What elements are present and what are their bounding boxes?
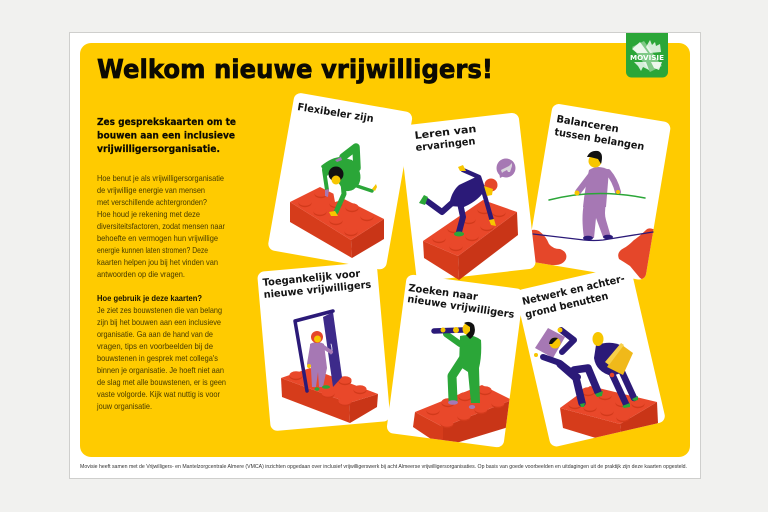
card: Flexibeler zijn [267,92,413,270]
usage text: vaste volgorde. Kijk wat nuttig is voor [97,390,220,399]
usage heading: Hoe gebruik je deze kaarten? [97,293,202,303]
illustration: figure with telescope on brick [413,322,512,447]
card title: Netwerk en achter- [521,274,626,308]
logo: Movisie: MOVISIE [630,54,664,62]
card title [414,124,477,154]
subheading: vrijwilligersorganisatie. [97,144,220,155]
usage text: de slag met alle bouwstenen, er is geen [97,378,226,387]
card: Toegankelijk voor nieuwe vrijwilligers [257,262,390,431]
yellow panel [80,43,690,457]
icon: speech bubble with zebra [496,158,516,178]
usage text: Je ziet zes bouwstenen die van belang [97,306,222,315]
card: Balanceren tussen belangen [526,103,671,284]
card title: Zoeken naar [408,283,478,303]
illustration: tightrope walker [532,150,654,279]
intro text: energie kunnen laten stromen? Deze [97,246,208,255]
card title [262,269,372,301]
card: Netwerk en achtergrond benutten [515,264,666,448]
usage text: jouw organisatie. [96,402,152,411]
illustration: stumbling figure on brick [419,158,518,280]
intro text [97,174,225,279]
intro text: behoefte en vermogen hun vrijwillige [97,234,218,243]
usage text [96,306,226,411]
card title: Balanceren [556,114,619,135]
logo: Movisie [626,33,668,78]
white sheet [70,32,700,478]
title: Welkom nieuwe vrijwilligers! [97,55,493,85]
usage text: binnen je organisatie. Je hoeft niet aan [97,366,224,375]
card title: tussen belangen [554,127,645,153]
subheading: Zes gesprekskaarten om te [97,117,236,128]
card title: Leren van [414,124,477,142]
intro text: Hoe benut je als vrijwilligersorganisatie [97,174,224,183]
card title: ervaringen [415,136,476,154]
card title: grond benutten [524,291,609,321]
card: Zoeken naar nieuwe vrijwilligers [386,274,524,448]
card title: Toegankelijk voor [262,269,361,289]
intro text: de vrijwillige energie van mensen [97,186,205,195]
intro text: diversiteitsfactoren, zodat mensen naar [97,222,225,231]
usage text: organisatie. Ga aan de hand van de [97,330,213,339]
card title: nieuwe vrijwilligers [407,294,515,321]
usage text: zijn bij het bouwen aan een inclusieve [97,318,221,327]
footnote: Movisie heeft samen met de Vrijwilligers- en Mantelzorgcentrale Almere (VMCA) inzichten opgedaan over inclusief vrijwilligerswerk bij acht Almeerse vrijwilligersorganisaties. Op basis van goede voorbeelden en uitdagingen uit de praktijk zijn deze kaarten opgesteld. [80,464,687,470]
intro text: kaarten helpen jou bij het vinden van [97,258,218,267]
card title: Flexibeler zijn [297,102,374,125]
illustration: two figures carrying bricks [534,328,658,446]
subheading: bouwen aan een inclusieve [97,130,235,142]
usage text: vragen, tips en voorbeelden bij de [97,342,213,351]
subheading [97,117,236,155]
illustration: brick with door [281,311,378,423]
intro text: met verschillende achtergronden? [97,198,207,207]
card title: nieuwe vrijwilligers [263,280,372,301]
card title [554,114,645,153]
usage text: bouwstenen in gesprek met collega's [97,354,218,363]
intro text: antwoorden op die vragen. [97,270,185,279]
card title [407,283,515,321]
intro text: Hoe houd je rekening met deze [97,210,200,219]
card title [521,274,626,321]
card: Leren van ervaringen [399,112,536,282]
illustration: contortionist on brick [290,147,384,258]
